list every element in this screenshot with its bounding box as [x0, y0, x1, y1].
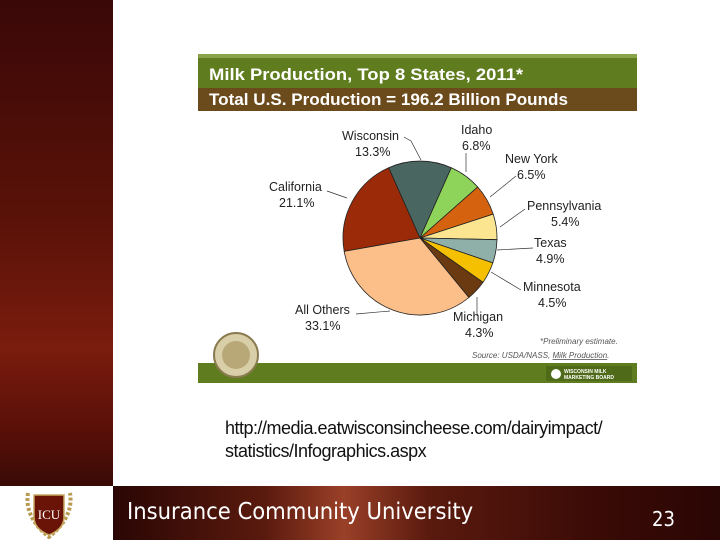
- icon: cheese seal: [214, 333, 258, 377]
- footer title: Insurance Community University: [127, 497, 473, 525]
- pie labels: 4.9%: [536, 252, 564, 266]
- pie labels: California: [269, 180, 322, 194]
- footnotes: *Preliminary estimate.: [540, 337, 618, 346]
- pie labels: Minnesota: [523, 280, 581, 294]
- pie labels: 6.8%: [462, 139, 490, 153]
- pie labels: 21.1%: [279, 196, 314, 210]
- pie labels: 13.3%: [355, 145, 390, 159]
- pie labels: Wisconsin: [342, 129, 399, 143]
- footnotes: [472, 337, 618, 360]
- subtitle bar: Total U.S. Production = 196.2 Billion Pounds: [209, 90, 568, 109]
- source url text: statistics/Infographics.aspx: [225, 441, 426, 461]
- pie labels: 33.1%: [305, 319, 340, 333]
- bottom bar: MARKETING BOARD: [564, 375, 614, 381]
- pie labels: [269, 123, 601, 340]
- pie labels: Pennsylvania: [527, 199, 601, 213]
- pie labels: Michigan: [453, 310, 503, 324]
- pie labels: 4.5%: [538, 296, 566, 310]
- chart panel: [198, 54, 637, 383]
- source url text: http://media.eatwisconsincheese.com/dairyimpact/: [225, 418, 602, 438]
- subtitle bar: [198, 88, 637, 111]
- pie labels: New York: [505, 152, 559, 166]
- pie labels: Idaho: [461, 123, 492, 137]
- pie labels: 4.3%: [465, 326, 494, 340]
- icon: ICU logo: ICU: [38, 507, 61, 522]
- pie labels: 6.5%: [517, 168, 546, 182]
- pie chart: [343, 161, 497, 315]
- footer bar: [113, 486, 720, 540]
- bottom bar: [198, 363, 637, 383]
- icon: ICU logo: [25, 492, 73, 539]
- pie labels: 5.4%: [551, 215, 580, 229]
- pie labels: Texas: [534, 236, 567, 250]
- bottom bar: WISCONSIN MILK: [564, 369, 607, 375]
- footnotes: Source: USDA/NASS, Milk Production.: [472, 351, 609, 360]
- pie labels: All Others: [295, 303, 350, 317]
- title bar: Milk Production, Top 8 States, 2011*: [209, 65, 523, 84]
- page number: 23: [652, 507, 675, 531]
- source url text: [225, 418, 603, 461]
- leader lines: [327, 137, 533, 316]
- sidebar: [0, 0, 113, 486]
- title bar: [198, 54, 637, 88]
